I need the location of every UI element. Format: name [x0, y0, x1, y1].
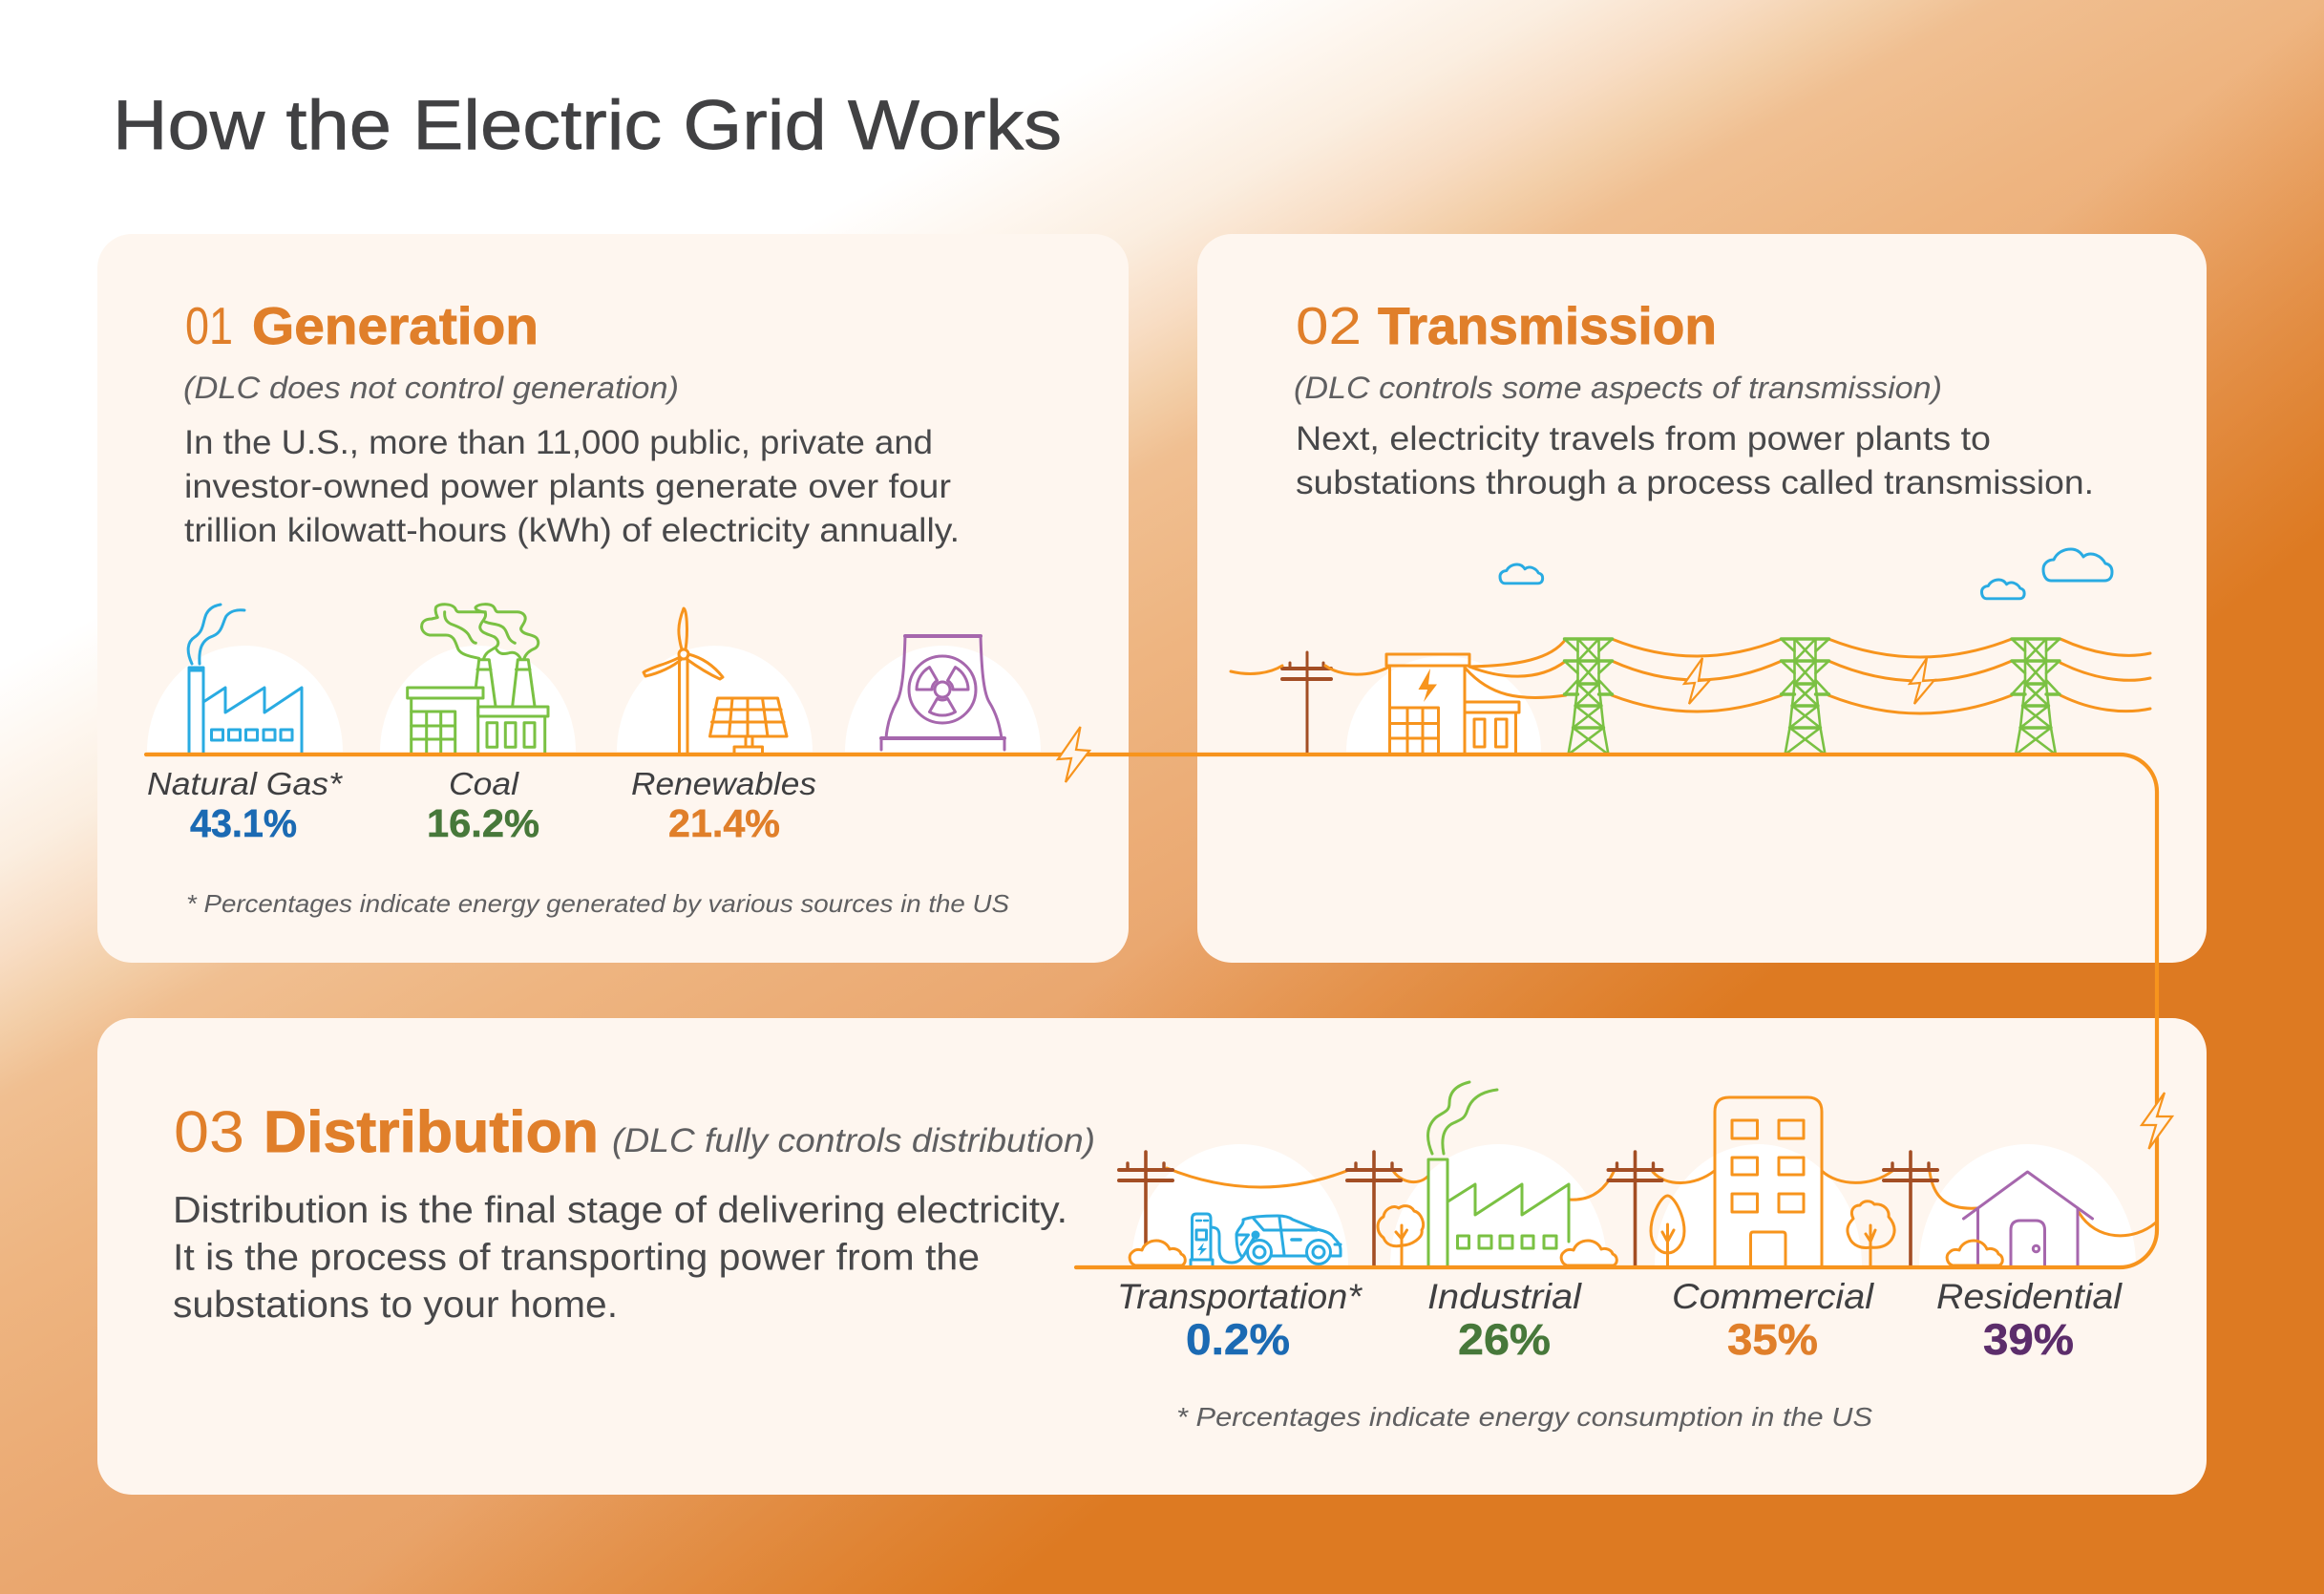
- footnote: distribution: * Percentages indicate energy consumption in the US: [1176, 1402, 1872, 1432]
- label: residential: Residential: [1936, 1277, 2123, 1316]
- text block: distribution: substations to your home.: [173, 1285, 618, 1326]
- label: renewables: [631, 766, 816, 845]
- icon: clouds: [1500, 549, 2112, 599]
- label: industrial: 26%: [1458, 1315, 1551, 1364]
- label: transportation: Transportation*: [1117, 1277, 1363, 1316]
- text block: transmission: Next, electricity travels from power plants to: [1296, 420, 1991, 457]
- title: How the Electric Grid Works: [113, 87, 1062, 164]
- background domes: [1131, 1144, 2136, 1265]
- icon: lightning bolt between towers 1 and 2: [1684, 658, 1710, 704]
- icon: utility poles: [1119, 1152, 1937, 1267]
- icon: transmission tower 1: [1564, 639, 1612, 754]
- label: coal: Coal: [449, 766, 520, 801]
- icon: natural gas factory: [147, 605, 343, 754]
- text block: distribution: It is the process of transporting power from the: [173, 1238, 980, 1278]
- icon: nuclear cooling tower: [845, 636, 1041, 752]
- heading: 02 Transmission: 02: [1296, 296, 1362, 355]
- icon: commercial building: [1715, 1097, 1822, 1265]
- subheading: distribution: (DLC fully controls distribution): [612, 1122, 1095, 1159]
- text block: generation: In the U.S., more than 11,000 public, private and: [184, 424, 933, 461]
- icon: lightning bolt on generation line: [1058, 727, 1089, 782]
- panel: transmission: [1197, 234, 2207, 963]
- footnote: generation: * Percentages indicate energy generated by various sources in the US: [186, 889, 1010, 918]
- icon: transmission tower 2: [1782, 639, 1829, 754]
- icon: coal plant: [380, 605, 576, 754]
- label: industrial: Industrial: [1427, 1277, 1583, 1316]
- icon: factory: [1428, 1082, 1569, 1265]
- text block: distribution: Distribution is the final stage of delivering electricity.: [173, 1190, 1067, 1231]
- icon: ev charger and car: [1191, 1214, 1341, 1265]
- label: transportation: 0.2%: [1186, 1315, 1290, 1364]
- distribution wires: [1167, 1168, 2156, 1236]
- icon: lightning bolt on vertical line: [2142, 1093, 2172, 1149]
- icon: house: [1947, 1172, 2093, 1265]
- text block: generation: investor-owned power plants generate over four: [184, 468, 951, 505]
- label: transportation: [1117, 1277, 1363, 1364]
- heading: 01 Generation: Generation: [252, 296, 539, 355]
- icon: lightning bolt between towers 2 and 3: [1910, 658, 1934, 704]
- label: renewables: Renewables: [631, 766, 816, 801]
- text block: generation: [184, 424, 960, 549]
- icon: utility pole: [1282, 652, 1331, 754]
- power line connecting panels: [146, 754, 2157, 1267]
- icon: bush at house: [1947, 1241, 2002, 1265]
- subheading: generation: (DLC does not control generation): [183, 371, 679, 405]
- text block: transmission: substations through a process called transmission.: [1296, 464, 2094, 501]
- label: natural gas: Natural Gas*: [147, 766, 343, 801]
- label: residential: 39%: [1983, 1315, 2074, 1364]
- label: commercial: 35%: [1727, 1315, 1818, 1364]
- icon: bushes and trees: [1130, 1196, 1894, 1265]
- label: natural gas: [147, 766, 343, 845]
- label: residential: [1936, 1277, 2123, 1364]
- label: industrial: [1427, 1277, 1583, 1364]
- heading: 02 Transmission: Transmission: [1378, 296, 1717, 355]
- label: commercial: [1672, 1277, 1875, 1364]
- label: renewables: 21.4%: [668, 801, 780, 845]
- panel: distribution: [97, 1018, 2207, 1495]
- text block: transmission: [1296, 420, 2094, 501]
- label: natural gas: 43.1%: [190, 801, 297, 845]
- icon: transmission tower 3: [2012, 639, 2060, 754]
- heading: 03 Distribution: Distribution: [264, 1099, 599, 1164]
- heading: 03 Distribution: 03: [174, 1099, 244, 1164]
- text block: generation: trillion kilowatt-hours (kWh) of electricity annually.: [184, 512, 960, 549]
- heading: 01 Generation: 01: [185, 296, 233, 355]
- panel: generation: [97, 234, 1129, 963]
- label: commercial: Commercial: [1672, 1277, 1875, 1316]
- text block: distribution: [173, 1190, 1067, 1326]
- icon: renewables: [617, 608, 813, 754]
- icon: substation: [1346, 654, 1541, 754]
- subheading: transmission: (DLC controls some aspects of transmission): [1294, 371, 1942, 405]
- label: coal: [427, 766, 539, 845]
- label: coal: 16.2%: [427, 801, 539, 845]
- transmission wires: [1231, 639, 2150, 713]
